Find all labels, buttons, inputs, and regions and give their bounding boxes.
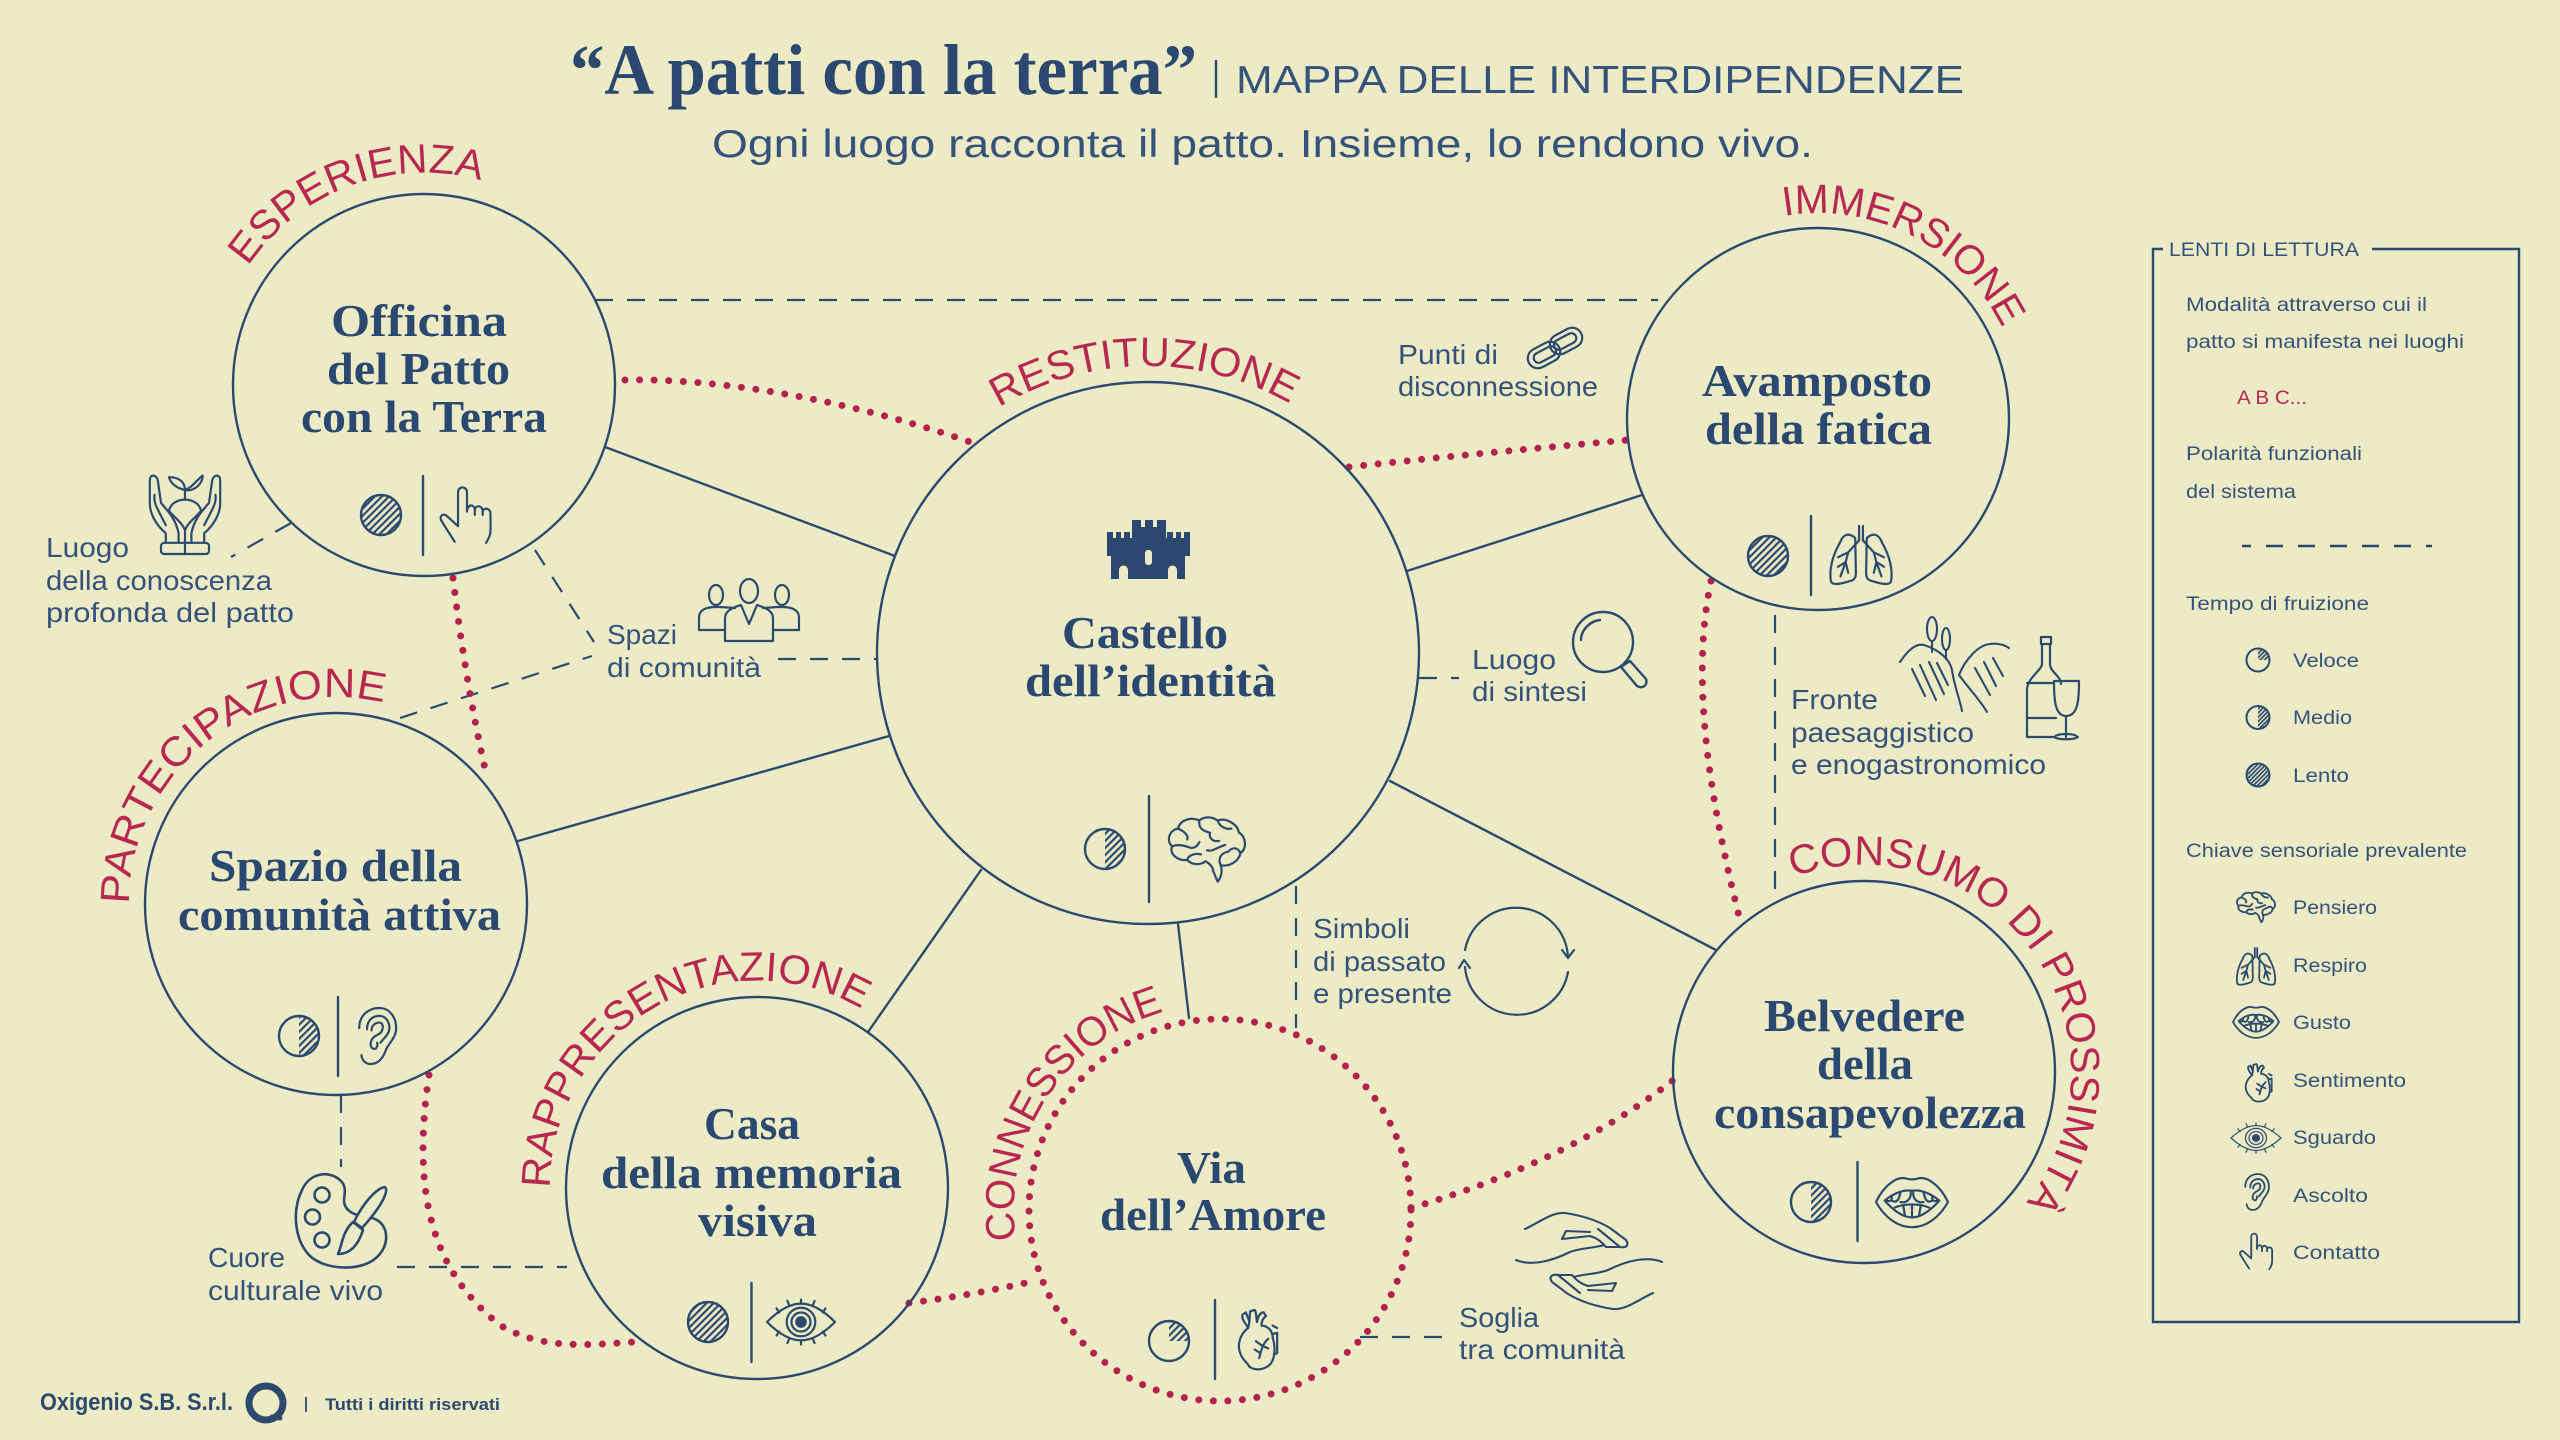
rights: Tutti i diritti riservati [325, 1395, 500, 1414]
node title: Avamposto [1702, 355, 1932, 406]
legend: modalità text: patto si manifesta nei luoghi [2186, 332, 2464, 353]
legend: polarità text [2186, 444, 2362, 503]
node title: Casa [704, 1098, 800, 1149]
node title: Spazio della [209, 840, 462, 891]
annotation: simboli: di passato [1313, 946, 1446, 977]
annotation: luogo della conoscenza: della conoscenza [46, 565, 272, 596]
divider [1856, 1162, 1859, 1241]
node title: consapevolezza [1714, 1087, 2026, 1138]
divider [750, 1283, 753, 1362]
company name: Oxigenio S.B. S.r.l. [40, 1389, 233, 1416]
icon: cycle arrows [1459, 908, 1574, 1015]
node: Belvedere della consapevolezza [1672, 836, 2100, 1264]
icon: magnifier [1573, 612, 1646, 687]
legend: tempo heading: Tempo di fruizione [2186, 594, 2369, 615]
time icon: medio [279, 1015, 320, 1057]
time icon: medio [1791, 1181, 1832, 1223]
icon: castle [1107, 520, 1190, 579]
legend: sentimento: Sentimento [2293, 1071, 2406, 1092]
title suffix: MAPPA DELLE INTERDIPENDENZE [1236, 59, 1964, 102]
legend: contatto [2240, 1234, 2380, 1269]
icon: ear [359, 1008, 396, 1064]
legend: medio: Medio [2293, 708, 2352, 729]
annotation: luogo della conoscenza [46, 532, 294, 628]
arc label: immersione: IMMERSIONE [1784, 184, 2026, 326]
legend: veloce [2246, 648, 2359, 672]
annotation: luogo della conoscenza: Luogo [46, 532, 129, 563]
node title [301, 295, 547, 442]
node title: comunità attiva [178, 889, 501, 940]
legend: polarità text: Polarità funzionali [2186, 444, 2362, 465]
divider [337, 997, 339, 1076]
legend: polarità text: del sistema [2186, 482, 2296, 503]
legend: lento [2246, 764, 2349, 787]
divider [1148, 796, 1150, 902]
arc label: restituzione: RESTITUZIONE [988, 338, 1301, 406]
annotation: simboli [1313, 913, 1452, 1009]
annotation: luogo di sintesi: di sintesi [1472, 676, 1587, 707]
node: Officina del Patto con la Terra [228, 144, 616, 578]
legend: respiro: Respiro [2293, 956, 2367, 977]
annotation: spazi di comunità [607, 619, 761, 683]
node title: dell’Amore [1100, 1189, 1326, 1240]
icon: eye [767, 1300, 835, 1344]
dotted polarity links [423, 380, 1739, 1401]
node title: dell’identità [1025, 655, 1276, 706]
icon: people [699, 579, 799, 641]
annotation: fronte paesaggistico: paesaggistico [1791, 717, 1974, 748]
annotation: punti di disconnessione: disconnessione [1398, 371, 1598, 402]
legend: modalità text: Modalità attraverso cui il [2186, 295, 2427, 316]
legend: contatto: Contatto [2293, 1243, 2380, 1264]
annotation: simboli: e presente [1313, 978, 1452, 1009]
solid connections [518, 447, 1716, 1032]
node: Via dell'Amore [986, 986, 1326, 1380]
time icon: lento [361, 495, 401, 535]
legend: ascolto [2245, 1174, 2368, 1210]
node title: del Patto [327, 343, 510, 394]
node title: Officina [331, 295, 507, 346]
legend: pensiero: Pensiero [2293, 898, 2377, 919]
node title: con la Terra [301, 391, 547, 442]
node title [1714, 990, 2026, 1138]
node: Avamposto della fatica [1626, 184, 2026, 612]
annotation: cuore culturale [208, 1242, 383, 1306]
annotation: fronte paesaggistico: Fronte [1791, 684, 1878, 715]
legend: pensiero [2237, 892, 2377, 922]
time icon: lento [688, 1302, 728, 1342]
annotation: cuore culturale: culturale vivo [208, 1275, 383, 1306]
icon: chain [1523, 324, 1587, 372]
icon: two hands [1516, 1213, 1662, 1309]
icon: mouth [1876, 1178, 1948, 1227]
node title [1100, 1142, 1326, 1240]
legend: medio [2246, 706, 2352, 730]
legend: sentimento [2246, 1064, 2406, 1102]
annotation: cuore culturale: Cuore [208, 1242, 285, 1273]
arc label: partecipazione: PARTECIPAZIONE [100, 668, 386, 900]
legend: sguardo [2231, 1123, 2376, 1153]
node title: visiva [698, 1195, 817, 1246]
node title: Belvedere [1764, 990, 1965, 1041]
legend: gusto: Gusto [2293, 1013, 2351, 1034]
icon: hills [1900, 617, 2009, 712]
annotation: luogo di sintesi: Luogo [1472, 644, 1556, 675]
annotation: simboli: Simboli [1313, 913, 1410, 944]
divider [1214, 1300, 1216, 1379]
annotation: spazi di comunità: Spazi [607, 619, 677, 650]
footer [40, 1386, 500, 1420]
annotation: fronte paesaggistico [1791, 684, 2046, 780]
icon: hand [441, 487, 491, 543]
subtitle: Ogni luogo racconta il patto. Insieme, lo rendono vivo. [712, 123, 1813, 166]
arc label: consumo di prossimità: CONSUMO DI PROSSIMITÀ [1790, 836, 2100, 1212]
title [570, 30, 1964, 166]
node: Spazio della comunità attiva [100, 668, 528, 1096]
legend: veloce: Veloce [2293, 651, 2359, 672]
icon: heart [1239, 1310, 1277, 1369]
arc label: connessione: CONNESSIONE [986, 986, 1162, 1240]
annotation: luogo di sintesi [1472, 644, 1587, 707]
time icon: veloce [1149, 1320, 1190, 1361]
legend: gusto [2233, 1007, 2351, 1038]
annotation: fronte paesaggistico: e enogastronomico [1791, 749, 2046, 780]
legend: chiave heading: Chiave sensoriale prevalente [2186, 841, 2467, 862]
arc label: rappresentazione: RAPPRESENTAZIONE [522, 952, 872, 1185]
legend panel [2153, 240, 2519, 1322]
annotation: soglia tra comunità [1459, 1302, 1625, 1365]
node title: Via [1177, 1142, 1246, 1193]
node title [1025, 607, 1276, 706]
node title: della memoria [601, 1147, 902, 1198]
time icon: lento [1748, 536, 1788, 576]
legend: sguardo: Sguardo [2293, 1128, 2376, 1149]
icon: brain [1169, 817, 1245, 882]
legend: dashed sample [2242, 545, 2432, 547]
legend: respiro [2237, 948, 2367, 985]
node title [1702, 355, 1932, 454]
divider [422, 476, 424, 555]
legend: lento: Lento [2293, 766, 2349, 787]
node title: Castello [1062, 607, 1228, 658]
dashed connections [231, 300, 1775, 1337]
annotation: spazi di comunità: di comunità [607, 652, 761, 683]
icon: palette [296, 1174, 386, 1268]
node title: della [1817, 1038, 1913, 1089]
annotation: luogo della conoscenza: profonda del patto [46, 597, 294, 628]
legend: ascolto: Ascolto [2293, 1186, 2368, 1207]
legend: red sample: A B C... [2237, 388, 2307, 409]
legend frame [2153, 249, 2519, 1322]
divider [1810, 516, 1812, 595]
icon: wine bottle and glass [2027, 637, 2079, 739]
logo [249, 1386, 283, 1420]
annotation: soglia tra comunità: Soglia [1459, 1302, 1539, 1333]
node title: della fatica [1705, 403, 1932, 454]
icon: hands with plant [150, 476, 220, 554]
legend: modalità text [2186, 295, 2464, 353]
icon: lungs [1830, 526, 1892, 584]
annotation: soglia tra comunità: tra comunità [1459, 1334, 1625, 1365]
annotation: punti di disconnessione [1398, 339, 1598, 402]
node title [601, 1098, 902, 1246]
node: Castello dell'identità [876, 338, 1420, 926]
arc label: esperienza: ESPERIENZA [228, 144, 481, 264]
node title [178, 840, 501, 940]
footer separator [305, 1397, 307, 1412]
annotation: punti di disconnessione: Punti di [1398, 339, 1498, 370]
title separator [1215, 60, 1217, 98]
time icon: medio [1085, 828, 1126, 870]
node: Casa della memoria visiva [522, 952, 950, 1380]
legend heading: LENTI DI LETTURA [2169, 240, 2359, 261]
main title: “A patti con la terra” [570, 30, 1197, 110]
